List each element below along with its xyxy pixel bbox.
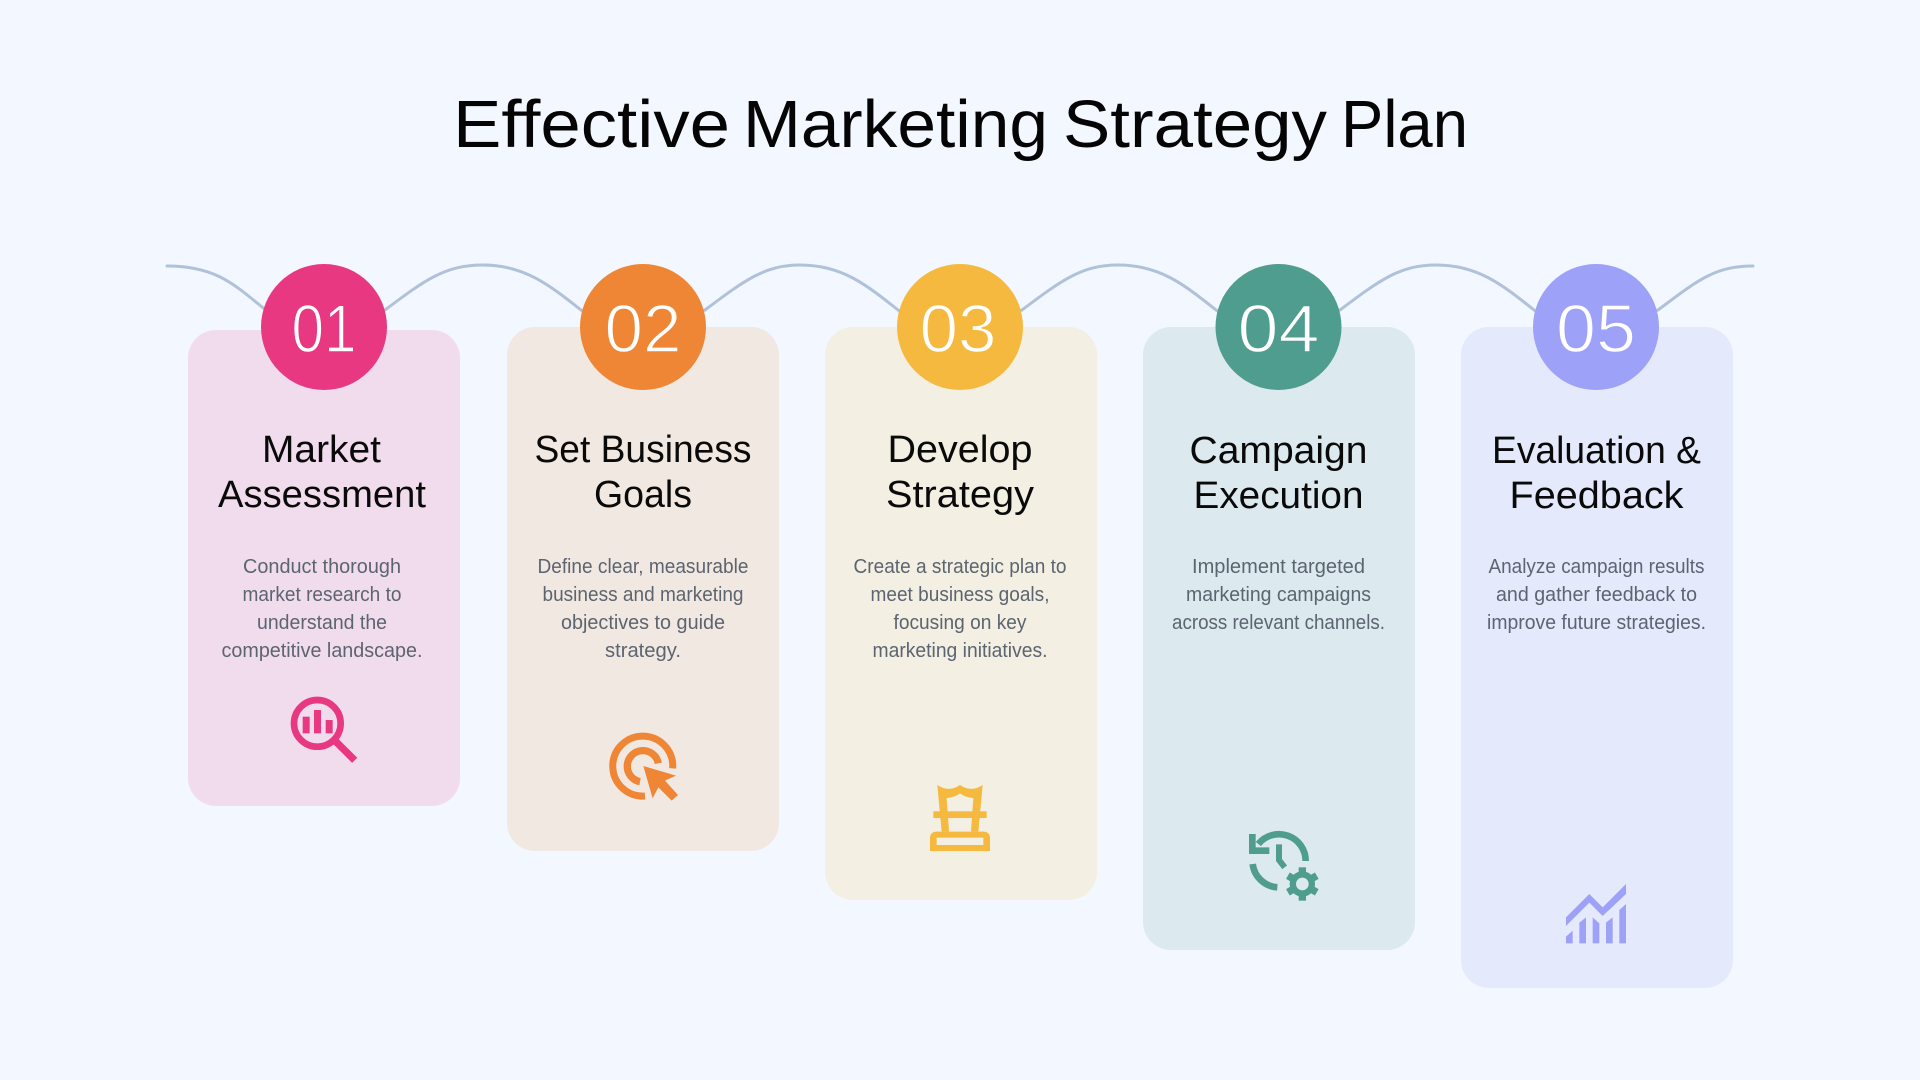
step 5 [1487,264,1706,943]
icon: clock with gear [1249,834,1319,901]
text: Set Business Goals description: objectives to guide [561,612,725,634]
text: Develop Strategy description: focusing on key [894,612,1026,634]
step 1 [218,264,426,760]
text: Set Business Goals description [538,556,748,662]
heading: Evaluation & Feedback: Evaluation & [1492,430,1701,472]
heading: Market Assessment: Market [262,429,381,471]
text: Set Business Goals description: strategy. [605,640,681,662]
title [453,87,1468,162]
heading: Develop Strategy [886,429,1034,516]
panel: step 3 card [825,327,1097,900]
text: Set Business Goals description: Define clear, measurable [538,556,748,578]
number badge 03: 03 [920,291,996,367]
heading: Set Business Goals: Set Business [534,429,752,471]
number badge 02 [580,264,706,390]
step 4 [1172,264,1385,901]
heading: Campaign Execution [1190,430,1368,517]
text: Develop Strategy description: marketing initiatives. [872,640,1048,662]
text: Campaign Execution description [1172,556,1385,634]
text: Develop Strategy description: Create a strategic plan to [854,556,1066,578]
number badge 01: 01 [292,291,356,367]
text: Evaluation & Feedback description: improve future strategies. [1487,612,1706,634]
panel: step 4 card [1143,327,1415,950]
number badge 05 [1533,264,1659,390]
panel: step 5 card [1461,327,1733,988]
heading: Develop Strategy: Strategy [886,474,1034,516]
text: Develop Strategy description [854,556,1066,662]
icon: rising chart [1566,884,1626,943]
heading: Set Business Goals: Goals [594,474,692,516]
heading: Evaluation & Feedback: Feedback [1510,475,1685,517]
title: Effective [453,87,730,162]
number badge 01 [261,264,387,390]
heading: Set Business Goals [534,429,752,516]
text: Market Assessment description [222,556,422,662]
heading: Market Assessment [218,429,426,516]
icon: chess piece [930,785,990,851]
number badge 02: 02 [604,291,682,367]
step 3 [854,264,1066,851]
icon: magnifier with bars [294,700,355,760]
icon: target with cursor [613,736,678,801]
text: Evaluation & Feedback description: and gather feedback to [1496,584,1697,606]
text: Campaign Execution description: across relevant channels. [1172,612,1385,634]
step 2 [534,264,752,801]
heading: Market Assessment: Assessment [218,474,426,516]
text: Campaign Execution description: marketing campaigns [1186,584,1371,606]
title: Marketing [743,87,1048,162]
heading: Evaluation & Feedback [1492,430,1701,517]
heading: Campaign Execution: Execution [1194,475,1364,517]
number badge 04 [1216,264,1342,390]
text: Market Assessment description: understand the [257,612,387,634]
text: Market Assessment description: market research to [242,584,402,606]
number badge 04: 04 [1238,291,1320,367]
text: Evaluation & Feedback description [1487,556,1706,634]
text: Develop Strategy description: meet business goals, [870,584,1050,606]
number badge 03 [897,264,1023,390]
title: Plan [1341,87,1468,162]
text: Market Assessment description: Conduct thorough [243,556,401,578]
heading: Develop Strategy: Develop [888,429,1032,471]
text: Evaluation & Feedback description: Analyze campaign results [1488,556,1704,578]
text: Campaign Execution description: Implement targeted [1192,556,1365,578]
panel: step 2 card [507,327,779,851]
title: Strategy [1063,87,1328,162]
connector wave line [167,265,1753,333]
text: Market Assessment description: competitive landscape. [222,640,422,662]
number badge 05: 05 [1556,291,1636,367]
heading: Campaign Execution: Campaign [1190,430,1368,472]
panel: step 1 card [188,330,460,806]
text: Set Business Goals description: business and marketing [542,584,744,606]
